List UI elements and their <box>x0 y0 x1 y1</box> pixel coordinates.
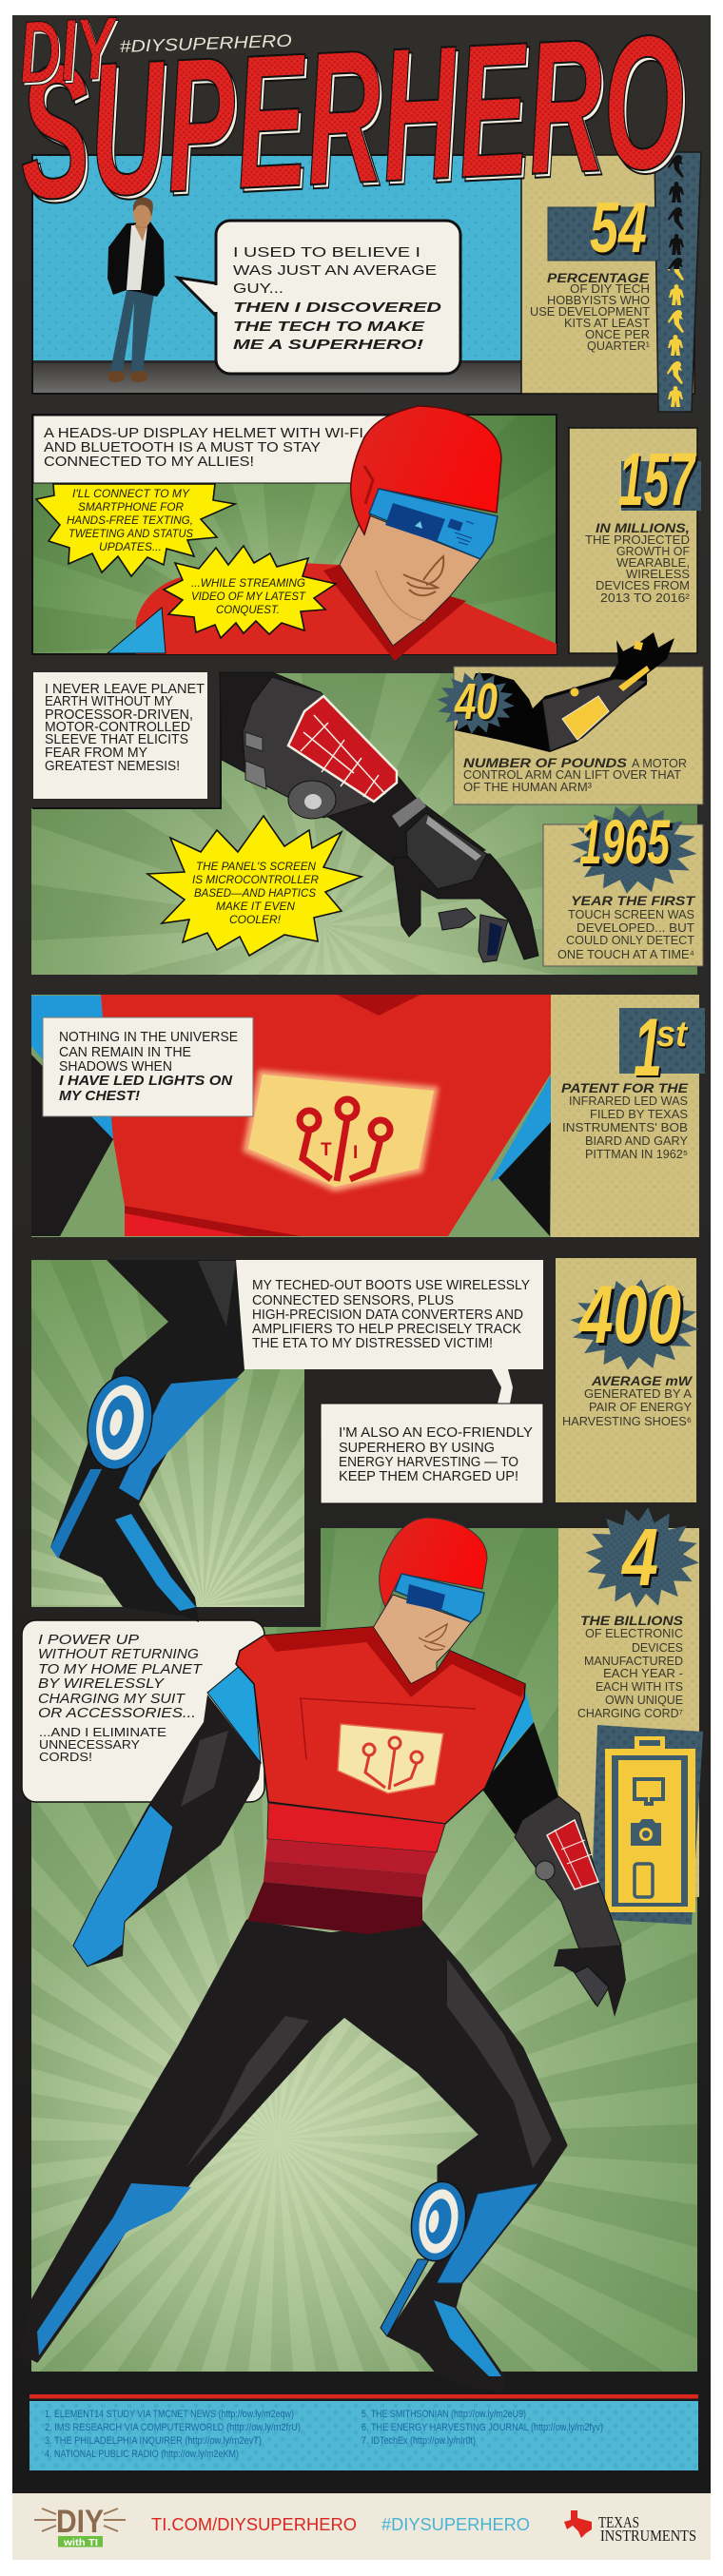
burst: smartphone: SMARTPHONE FOR <box>78 500 184 513</box>
caption: teched-out boots: CONNECTED SENSORS, PLUS <box>252 1292 454 1308</box>
figure: full-body superhero <box>21 1518 626 2391</box>
stat text: 1965: ONE TOUCH AT A TIME⁴ <box>557 948 694 961</box>
stat text: 400: GENERATED BY A <box>584 1387 693 1401</box>
speech bubble: wireless charging: BY WIRELESSLY <box>38 1675 165 1692</box>
icon: glowing TI chest emblem: I <box>353 1143 358 1163</box>
hero: left arm and blue glove <box>73 1656 261 1966</box>
panel: heads-up helmet <box>32 406 557 661</box>
caption: energy harvesting: SUPERHERO BY USING <box>339 1440 495 1456</box>
number star: 40 <box>433 668 518 737</box>
icon: glowing TI chest emblem <box>243 1070 439 1191</box>
title word: DIY: DIY <box>19 3 124 105</box>
caption: LED lights <box>43 1017 253 1116</box>
stat text: 54: USE DEVELOPMENT <box>530 305 650 319</box>
burst: panel screen: BASED—AND HAPTICS <box>194 886 316 900</box>
stat text: 1st: PITTMAN IN 1962⁵ <box>585 1148 688 1161</box>
sources block: 7. IDTechEx (http://ow.ly/nIr0t) <box>362 2435 476 2447</box>
stat text: 400: PAIR OF ENERGY <box>589 1401 693 1414</box>
caption: sleeve: FEAR FROM MY <box>45 745 147 761</box>
logo: Texas Instruments: INSTRUMENTS <box>600 2527 696 2545</box>
caption: LED lights: SHADOWS WHEN <box>59 1058 172 1075</box>
caption: LED lights: CAN REMAIN IN THE <box>59 1044 191 1060</box>
stat text: 1965 <box>557 894 696 961</box>
stat text: 1965: COULD ONLY DETECT <box>566 934 694 947</box>
footer link: TI.COM/DIYSUPERHERO <box>151 2515 357 2534</box>
stat panel: 400 mW <box>556 1258 706 1502</box>
speech bubble: wireless charging: CORDS! <box>39 1751 92 1764</box>
hero: right boot target emblem <box>405 2178 472 2265</box>
number star: 1965 <box>563 800 704 899</box>
sources block <box>29 2394 698 2470</box>
stat panel: 1965 <box>543 800 704 966</box>
caption: teched-out boots: HIGH-PRECISION DATA CONVERTERS AND <box>252 1307 523 1323</box>
stat text: 157: DEVICES FROM <box>596 579 690 592</box>
caption group: boots <box>236 1260 543 1404</box>
figure: red helmet <box>351 406 501 534</box>
stat text: 40: A MOTOR <box>632 757 687 770</box>
stat text: 400 <box>562 1374 693 1428</box>
boot: target emblem <box>79 1369 161 1476</box>
speech bubble: intro: THE TECH TO MAKE <box>233 319 425 335</box>
number box: 54: 54 <box>592 190 649 270</box>
caption: LED lights: I HAVE LED LIGHTS ON <box>59 1073 233 1089</box>
stat text: 1st: INFRARED LED WAS <box>569 1094 688 1108</box>
stat text: 4: MANUFACTURED <box>584 1655 683 1668</box>
speech bubble: wireless charging: TO MY HOME PLANET <box>38 1661 204 1677</box>
hashtag: #DIYSUPERHERO <box>119 31 292 56</box>
stat text: 40: CONTROL ARM CAN LIFT OVER THAT <box>463 768 681 782</box>
number star: 4: 4 <box>620 1513 658 1603</box>
title word: DIY: DIY <box>17 0 122 102</box>
speech bubble: intro: WAS JUST AN AVERAGE <box>233 262 437 279</box>
figure: red vest <box>101 995 551 1236</box>
sources block: 1. ELEMENT14 STUDY VIA TMCNET NEWS (http://ow.ly/m2eqw) <box>45 2409 294 2420</box>
burst: streaming video: VIDEO OF MY LATEST <box>191 590 307 603</box>
burst: panel screen: MAKE IT EVEN <box>216 900 295 913</box>
stat text: 40 <box>463 756 687 794</box>
logo: DIY with TI: with TI <box>63 2537 98 2548</box>
caption: helmet: CONNECTED TO MY ALLIES! <box>44 454 254 470</box>
panel: sleeve outlines and dark notch <box>32 672 221 808</box>
stat text: 1965: DEVELOPED... BUT <box>576 921 694 935</box>
number star: 40: 40 <box>454 673 498 730</box>
sources block: 2. IMS RESEARCH VIA COMPUTERWORLD (http://ow.ly/m2frU) <box>45 2422 301 2433</box>
stat panel: 157 million <box>569 428 701 653</box>
stat text: 54: PERCENTAGE <box>547 271 650 285</box>
logo: DIY with TI <box>34 2504 126 2548</box>
hero: right leg <box>285 1922 566 2391</box>
number box: 1st: 1 <box>635 1004 664 1095</box>
stat text: 4: OF ELECTRONIC <box>585 1627 683 1640</box>
burst: panel screen: COOLER! <box>229 913 282 926</box>
stat text: 400: HARVESTING SHOES⁶ <box>562 1415 692 1428</box>
caption: sleeve: EARTH WITHOUT MY <box>45 693 173 709</box>
caption: helmet: AND BLUETOOTH IS A MUST TO STAY <box>44 439 321 455</box>
figure: blue sleeve and black arm <box>31 996 551 1236</box>
caption: helmet <box>33 416 390 483</box>
footer hashtag: #DIYSUPERHERO <box>381 2515 530 2534</box>
hero: belts <box>247 1803 445 1934</box>
figure: small yellow-panel arm <box>455 632 674 752</box>
sources block: 5. THE SMITHSONIAN (http://ow.ly/m2eU9) <box>362 2409 526 2420</box>
icon: monitor <box>635 1779 663 1804</box>
burst: panel screen: IS MICROCONTROLLER <box>192 873 319 886</box>
number star: 1965: 1965 <box>579 806 671 877</box>
caption: energy harvesting <box>321 1404 543 1503</box>
figure: hero chest and shoulder <box>107 563 557 661</box>
speech bubble: intro: ME A SUPERHERO! <box>233 337 423 353</box>
stat text: 4: THE BILLIONS <box>580 1614 683 1628</box>
footer band <box>12 2493 711 2560</box>
sources block: 3. THE PHILADELPHIA INQUIRER (http://ow.ly/m2evT) <box>45 2435 262 2447</box>
hero: right arm with sleeve <box>478 1693 626 2017</box>
speech bubble: wireless charging: OR ACCESSORIES... <box>38 1705 196 1721</box>
number box: 54 <box>548 187 659 270</box>
speech bubble: wireless charging: ...AND I ELIMINATE <box>39 1726 166 1739</box>
sources block: 4. NATIONAL PUBLIC RADIO (http://ow.ly/m2eKM) <box>45 2449 239 2460</box>
stat text: 157: WEARABLE, <box>616 556 690 570</box>
speech bubble: wireless charging: CHARGING MY SUIT <box>38 1691 186 1707</box>
panel: intro, average guy <box>32 155 522 394</box>
caption: LED lights: NOTHING IN THE UNIVERSE <box>59 1029 238 1045</box>
burst: streaming video: ...WHILE STREAMING <box>191 576 305 590</box>
caption: teched-out boots: MY TECHED-OUT BOOTS USE WIRELESSLY <box>252 1277 530 1293</box>
logo: Texas Instruments: TEXAS <box>598 2513 639 2531</box>
stat text: 40: OF THE HUMAN ARM³ <box>463 781 592 794</box>
hero: red vest <box>236 1627 525 1824</box>
burst: panel screen: THE PANEL'S SCREEN <box>196 860 316 873</box>
burst: smartphone <box>36 484 235 576</box>
caption: energy harvesting: KEEP THEM CHARGED UP! <box>339 1468 518 1484</box>
stat text: 157: THE PROJECTED <box>585 533 690 547</box>
stat text: 157: GROWTH OF <box>616 545 690 558</box>
logo: Texas Instruments <box>564 2510 696 2545</box>
stat text: 157: IN MILLIONS, <box>596 521 690 535</box>
logo: DIY with TI: DIY <box>56 2504 104 2540</box>
caption: helmet: A HEADS-UP DISPLAY HELMET WITH WI-FI <box>44 425 363 441</box>
green panel: helmet background <box>32 415 557 654</box>
burst: smartphone: I'LL CONNECT TO MY <box>72 487 190 500</box>
caption: sleeve: PROCESSOR-DRIVEN, <box>45 707 193 723</box>
stat text: 400: AVERAGE mW <box>591 1374 693 1388</box>
stat text: 54: ONCE PER <box>585 328 650 341</box>
stat text: 4: OWN UNIQUE <box>605 1694 683 1707</box>
stat text: 54: HOBBYISTS WHO <box>547 294 650 307</box>
hero: left leg <box>21 1921 369 2361</box>
pictogram strip: 10 superheroes <box>655 152 701 412</box>
caption: energy harvesting: I'M ALSO AN ECO-FRIENDLY <box>339 1424 533 1441</box>
icon: glowing TI chest emblem: T <box>321 1140 332 1160</box>
stat text: 54: OF DIY TECH <box>570 282 650 296</box>
speech bubble: wireless charging: UNNECESSARY <box>39 1738 141 1752</box>
stat text: 54 <box>530 271 650 353</box>
figure: ordinary man <box>107 197 165 382</box>
stat text: 4 <box>577 1614 683 1720</box>
stat text: 54: QUARTER¹ <box>587 339 650 353</box>
number box: 1st <box>619 1002 705 1095</box>
panel: LED chest <box>31 995 551 1236</box>
speech bubble: wireless charging <box>22 1620 264 1802</box>
figure: boot close-up <box>50 1260 244 1622</box>
speech bubble: intro: I USED TO BELIEVE I <box>233 244 420 261</box>
stat panel: 4 billion <box>558 1502 705 1925</box>
stat panel: 40 pounds <box>433 632 703 804</box>
number box: 54: 54 <box>590 187 647 267</box>
caption: energy harvesting: ENERGY HARVESTING — TO <box>339 1454 518 1470</box>
stat text: 4: EACH YEAR - <box>603 1667 683 1680</box>
stat text: 4: DEVICES <box>632 1641 683 1655</box>
icon: smartphone <box>635 1864 653 1897</box>
number box: 1st: st <box>657 1017 689 1056</box>
green panel: sleeve background <box>31 673 697 975</box>
number star: 4: 4 <box>622 1516 660 1606</box>
burst: streaming video <box>164 546 336 638</box>
green panel: chest background <box>31 995 551 1237</box>
icon: camera <box>631 1819 661 1846</box>
caption: sleeve: MOTOR-CONTROLLED <box>45 719 190 735</box>
icon: battery with devices <box>591 1725 703 1925</box>
speech bubble: wireless charging: WITHOUT RETURNING <box>38 1646 199 1662</box>
stat text: 4: EACH WITH ITS <box>596 1680 683 1694</box>
hero: neck and face <box>373 1595 471 1684</box>
stat panel: 1st patent <box>551 995 705 1237</box>
caption: sleeve: I NEVER LEAVE PLANET <box>45 681 205 697</box>
title: DIY Superhero <box>14 0 693 243</box>
number box: 1st: st <box>656 1015 688 1055</box>
green panel: full hero background <box>31 1528 697 2372</box>
speech bubble: intro: THEN I DISCOVERED <box>233 300 441 316</box>
stat text: 157 <box>585 521 690 605</box>
title word: DIY <box>17 0 124 105</box>
caption: sleeve: SLEEVE THAT ELICITS <box>45 731 188 747</box>
number star: 400: 400 <box>581 1272 684 1364</box>
stat text: 1st: BIARD AND GARY <box>585 1134 689 1148</box>
stat text: 4: CHARGING CORD⁷ <box>577 1707 683 1720</box>
stat panel: 54 percent <box>521 152 701 412</box>
burst: smartphone: HANDS-FREE TEXTING, <box>67 513 193 527</box>
burst: smartphone: TWEETING AND STATUS <box>68 527 193 540</box>
caption: teched-out boots: THE ETA TO MY DISTRESSED VICTIM! <box>252 1335 493 1351</box>
caption: sleeve <box>33 672 207 799</box>
stat text: 1965: TOUCH SCREEN WAS <box>568 908 694 921</box>
caption: sleeve: GREATEST NEMESIS! <box>45 758 180 774</box>
burst: panel screen <box>147 816 362 956</box>
number star: 40: 40 <box>456 675 499 732</box>
caption: teched-out boots <box>236 1260 543 1369</box>
caption: LED lights: MY CHEST! <box>59 1088 140 1104</box>
speech bubble: intro <box>178 221 460 374</box>
figure: blue visor display <box>369 489 498 559</box>
stat text: 1st: FILED BY TEXAS <box>590 1108 688 1121</box>
stat text: 1965: YEAR THE FIRST <box>571 894 696 908</box>
figure: robotic sleeve arm <box>220 672 538 962</box>
connector between captions <box>492 1369 513 1404</box>
stat text: 157: 2013 TO 2016² <box>600 591 690 605</box>
number star: 1965: 1965 <box>582 809 674 880</box>
stat text: 54: KITS AT LEAST <box>564 317 650 330</box>
caption: teched-out boots: AMPLIFIERS TO HELP PRECISELY TRACK <box>252 1321 521 1337</box>
speech bubble: intro: GUY... <box>233 281 283 297</box>
speech bubble: wireless charging: I POWER UP <box>38 1632 139 1648</box>
number star: 400: 400 <box>578 1269 681 1361</box>
burst: smartphone: UPDATES... <box>99 540 162 553</box>
sources block: 6. THE ENERGY HARVESTING JOURNAL (http://ow.ly/m2fyv) <box>362 2422 603 2433</box>
hero: helmet <box>380 1518 487 1622</box>
stat text: 1st <box>561 1081 689 1161</box>
stat text: 1st: INSTRUMENTS' BOB <box>562 1121 688 1134</box>
number box: 1st: 1 <box>634 1002 662 1094</box>
stat text: 40: NUMBER OF POUNDS <box>463 756 627 770</box>
number star: 4 <box>579 1502 705 1613</box>
stat text: 1st: PATENT FOR THE <box>561 1081 689 1095</box>
stat text: 157: WIRELESS <box>626 568 690 581</box>
green panel: boot background <box>31 1260 304 1607</box>
figure: hero face <box>340 513 480 646</box>
icon: TI emblem on vest <box>338 1724 443 1793</box>
burst: streaming video: CONQUEST. <box>216 603 280 616</box>
